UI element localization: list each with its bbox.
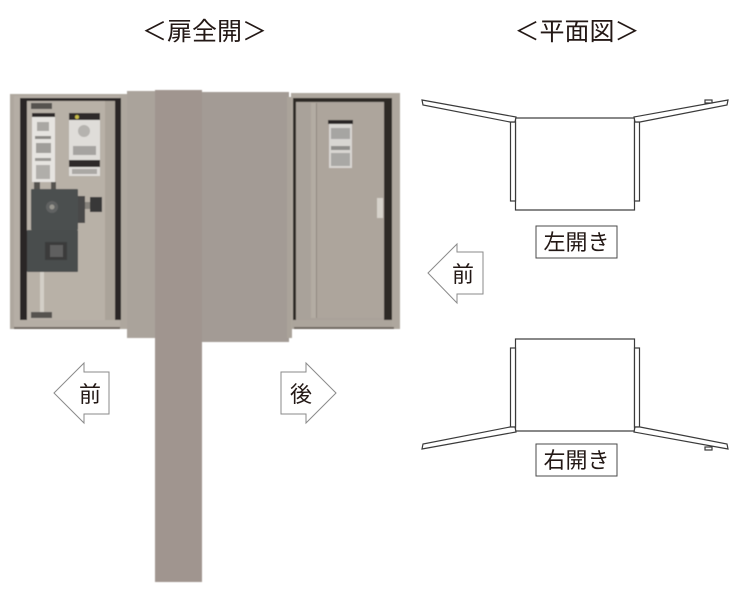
title: plan view: ＜平面図＞: [514, 18, 640, 46]
sticker: [328, 120, 353, 168]
warning sticker right: [69, 113, 100, 176]
door handle: [705, 100, 712, 103]
left open door: [10, 94, 128, 329]
right open door: [291, 93, 400, 329]
dark lock mechanism: [27, 182, 102, 272]
label: left-hinged: [536, 226, 617, 258]
arrow: rear (right): 後: [290, 382, 312, 407]
center body: [127, 91, 292, 342]
arrow: front (left): 前: [79, 382, 101, 407]
door handle: [377, 198, 383, 218]
cabinet body: [516, 339, 634, 431]
cabinet body: [516, 118, 634, 210]
arrow: front in plan: 前: [452, 262, 474, 287]
side panels: [510, 348, 516, 427]
instruction sticker left: [32, 113, 55, 182]
product photo: mailbox with open doors: [10, 90, 400, 582]
plan: left-hinged: [422, 100, 728, 210]
label: right-hinged: [536, 444, 617, 476]
label: left-hinged: 左開き: [543, 230, 610, 255]
post: [155, 90, 202, 582]
left door: [422, 427, 516, 449]
arrow: front (left): [54, 363, 109, 423]
left door: [422, 100, 516, 122]
rod: [40, 272, 44, 312]
title: door fully open: ＜扉全開＞: [142, 18, 267, 46]
bottom slot label: [31, 312, 52, 318]
inner door panel: [317, 103, 384, 318]
right door: [634, 427, 728, 449]
arrow: rear (right): [281, 363, 336, 423]
arrow: front in plan: [428, 244, 483, 303]
plan: right-hinged: [422, 339, 728, 450]
top slot label: [31, 103, 52, 109]
label: right-hinged: 右開き: [543, 448, 610, 473]
door handle: [705, 447, 712, 450]
side panels: [510, 122, 516, 201]
right door: [634, 100, 728, 122]
